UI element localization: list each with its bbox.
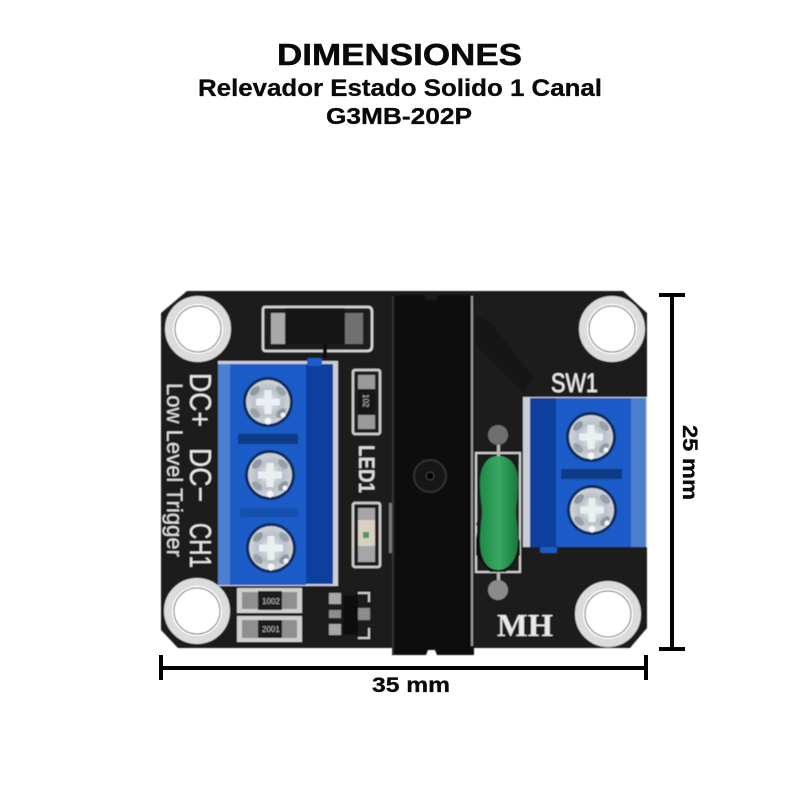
green varistor [476,425,520,600]
subtitle: model: G3MB-202P [326,103,472,129]
mounting hole bottom right [579,585,637,643]
diode [263,307,372,358]
silkscreen: Low Level Trigger: Low Level Trigger [162,383,187,557]
resistor 2001 [237,616,302,642]
mounting hole top right [583,300,641,358]
relay mounting hole [414,460,446,492]
resistor 2001: 2001 [262,625,280,634]
relay module board [161,291,647,655]
screw 2 [245,450,295,500]
silkscreen: MH: MH [497,607,553,643]
height dimension arrow [659,295,685,649]
mounting hole top left [169,300,227,358]
silkscreen: DC+: DC+ [183,373,218,427]
copper trace shading [476,316,534,392]
led [353,503,380,567]
silkscreen: CH1: CH1 [183,523,218,568]
screw 3 [246,523,296,573]
subtitle: product name: Relevador Estado Solido 1 Canal [198,75,602,102]
screw 2 [567,485,617,535]
right terminal block [523,397,647,553]
height label: 25 mm [678,425,701,500]
title: DIMENSIONES [277,37,522,72]
solid state relay [389,295,474,655]
transistor [329,593,370,638]
left terminal block [218,358,338,586]
resistor 1002 [237,588,302,613]
pcb [161,291,647,648]
resistor 102: 102 [361,394,370,408]
silkscreen: LED1: LED1 [354,445,379,493]
mounting hole bottom left [168,582,226,640]
screw 1 [243,377,293,427]
resistor 1002: 1002 [262,597,280,606]
width dimension arrow [161,655,646,680]
silkscreen: DC-: DC− [183,448,218,502]
resistor 102 [353,370,380,434]
silkscreen: SW1: SW1 [551,368,598,398]
width label: 35 mm [372,674,450,697]
screw 1 [566,412,616,462]
